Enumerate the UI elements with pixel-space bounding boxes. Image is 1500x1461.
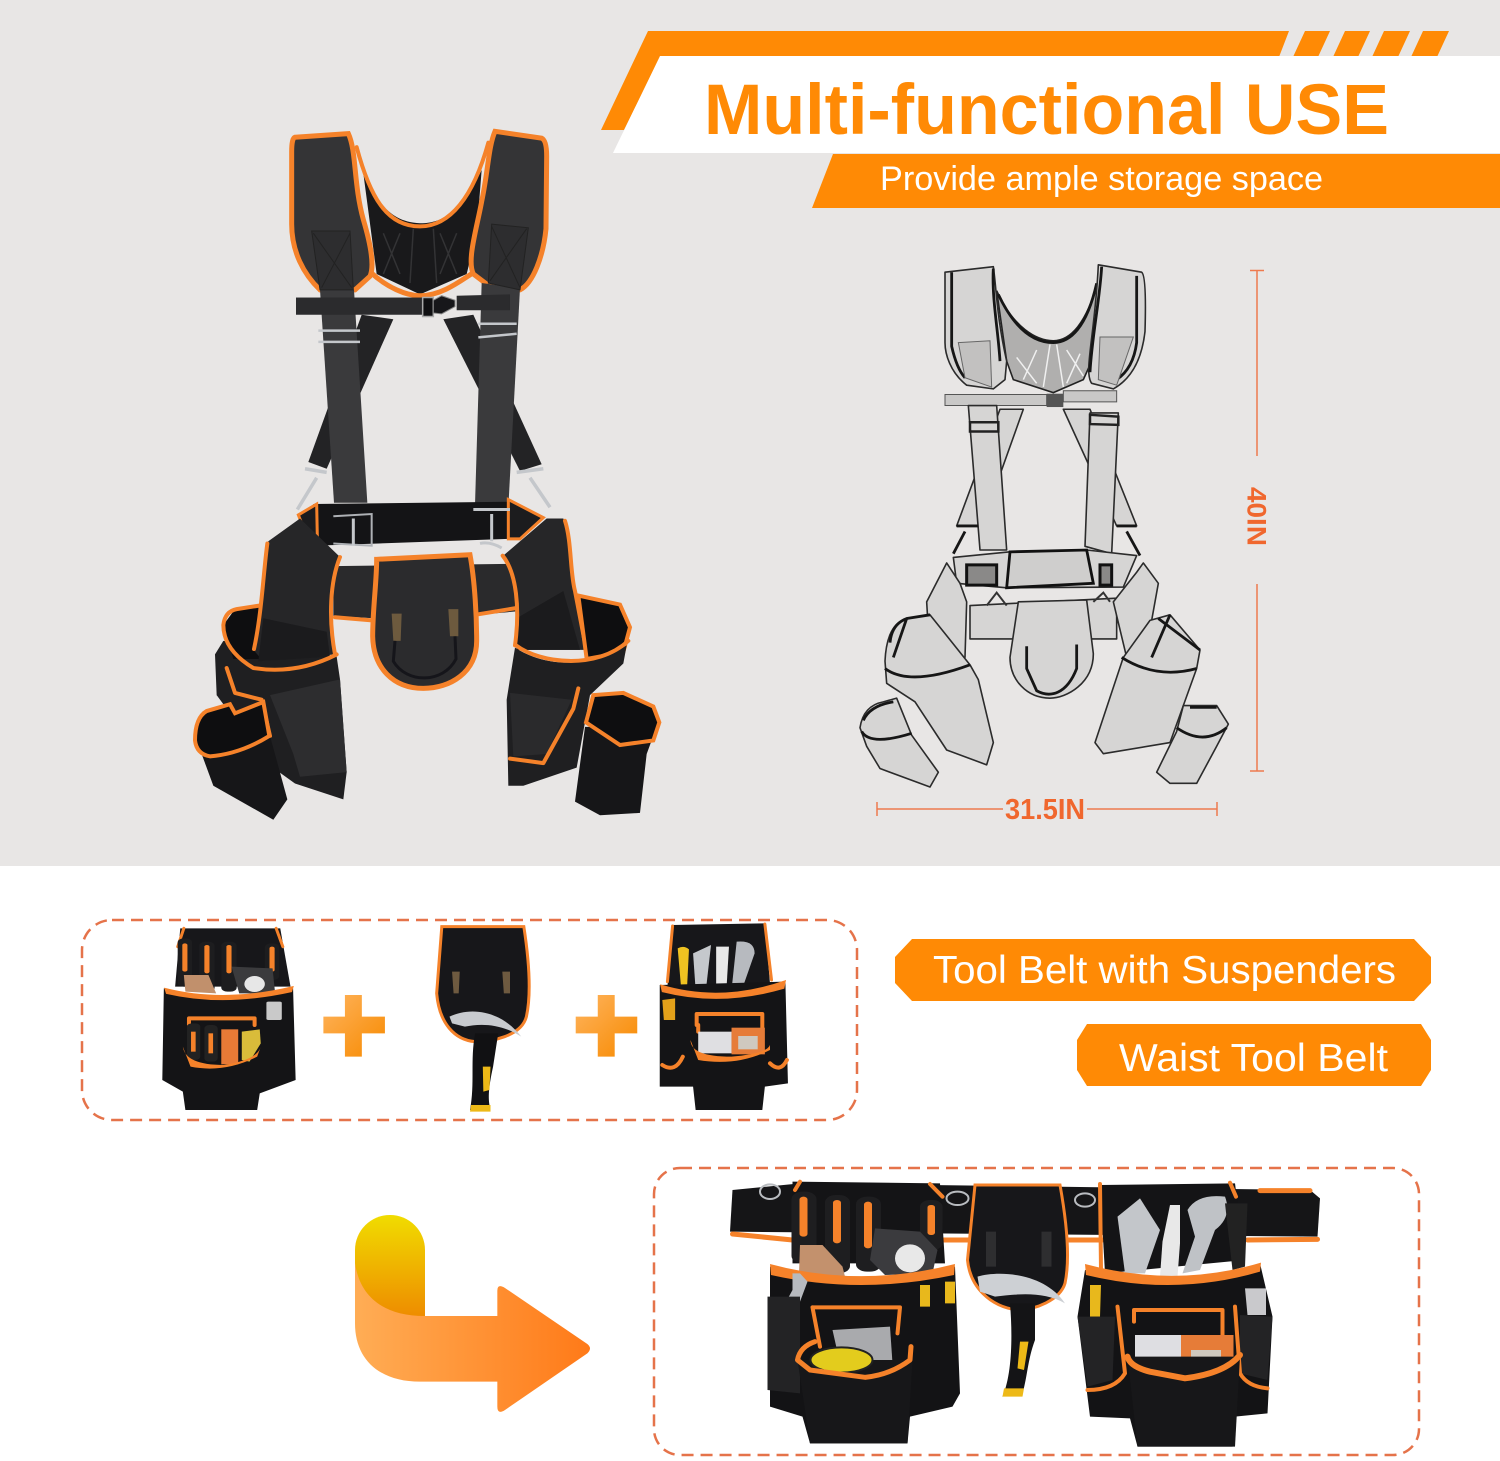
- dimension: width 31.5IN: [877, 794, 1217, 826]
- label: Waist Tool Belt: [1077, 1024, 1431, 1086]
- arrow: yellow to orange bent arrow: [355, 1215, 590, 1412]
- title: Multi-functional USE: [704, 71, 1389, 150]
- panel: grey top background: [0, 0, 1500, 866]
- dimension: height 40IN: [1242, 270, 1272, 771]
- hammer holder: [437, 927, 529, 1112]
- subtitle: Provide ample storage space: [880, 160, 1323, 198]
- dimension: width 31.5IN: 31.5IN: [1005, 794, 1085, 826]
- icon: plus 1: [323, 995, 385, 1057]
- label: Tool Belt with Suspenders: Tool Belt with Suspenders: [933, 949, 1396, 992]
- label: Tool Belt with Suspenders: [895, 939, 1431, 1001]
- panel: dashed box with assembled waist tool belt: [654, 1168, 1419, 1455]
- panel: dashed box with three tool pouches: [82, 920, 857, 1120]
- dimension: height 40IN: 40IN: [1242, 487, 1272, 546]
- icon: plus 2: [576, 995, 637, 1057]
- product photo: tool belt with suspenders: [195, 131, 659, 820]
- header banner: [601, 31, 1500, 208]
- label: Waist Tool Belt: Waist Tool Belt: [1119, 1037, 1388, 1080]
- line sketch of tool belt: [860, 265, 1228, 787]
- panel: white bottom background: [0, 866, 1500, 1461]
